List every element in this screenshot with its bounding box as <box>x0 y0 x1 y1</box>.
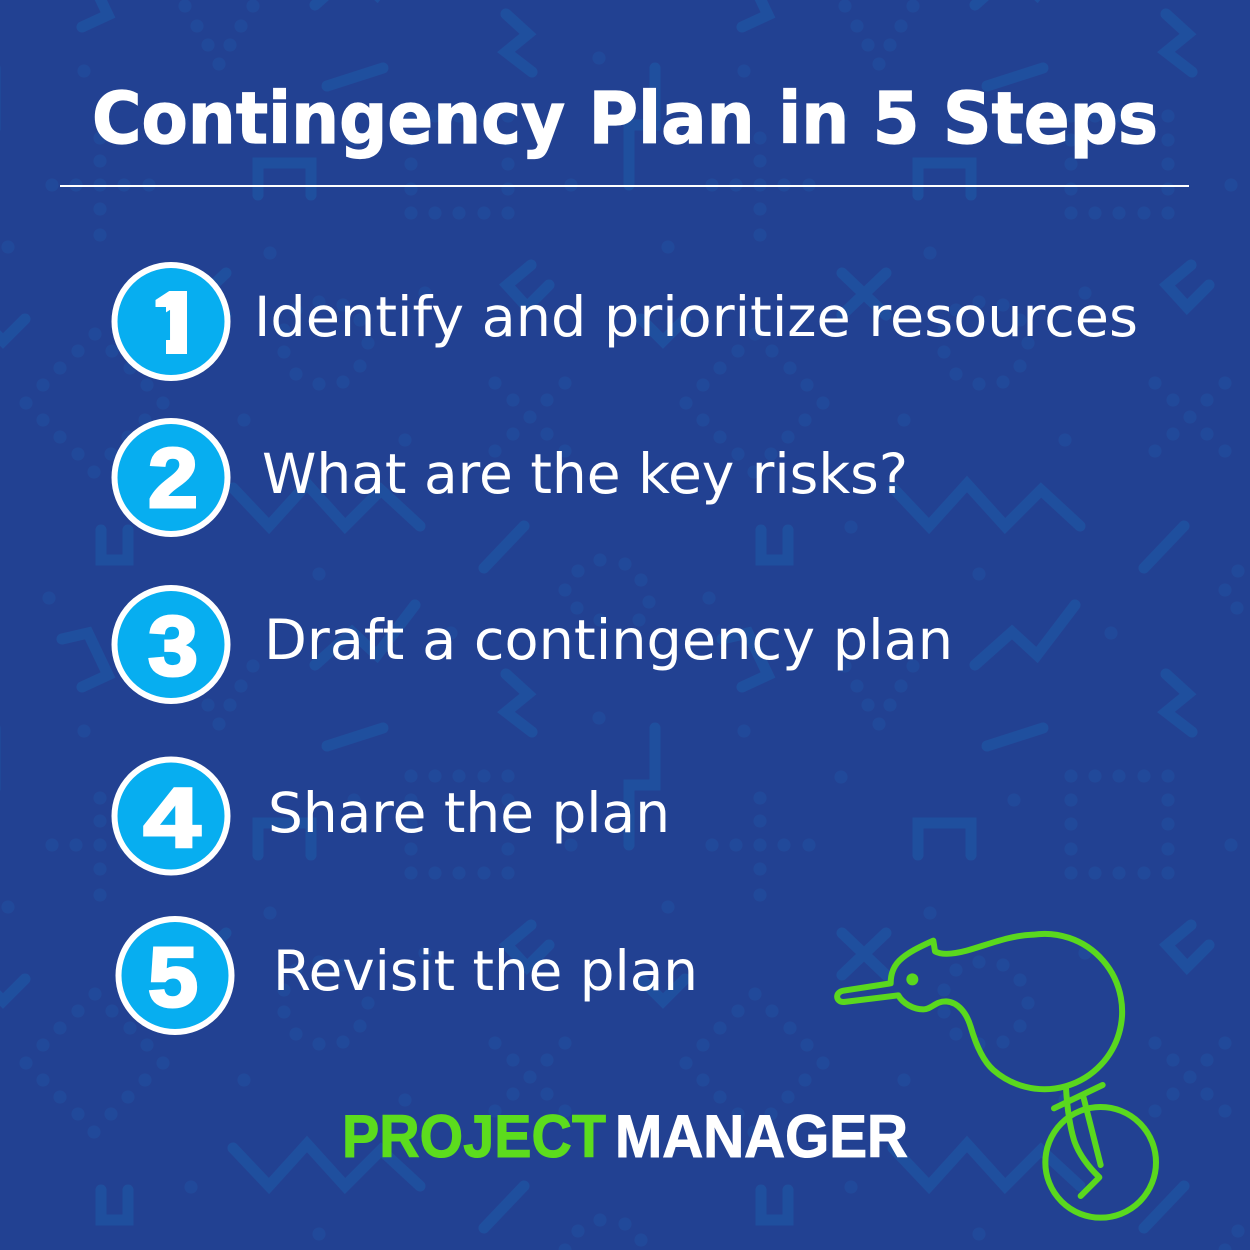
step 4 label: Share the plan <box>268 781 670 845</box>
step 4 <box>114 760 670 872</box>
step 3 number: 3 <box>148 599 198 693</box>
kiwi body <box>837 934 1122 1089</box>
title: Contingency Plan in 5 Steps <box>92 77 1158 160</box>
step 1 badge <box>114 265 228 378</box>
step 5 badge <box>118 919 232 1032</box>
logo: MANAGER: MANAGER <box>615 1103 908 1170</box>
step 4 badge <box>114 760 228 872</box>
step 1 number: 1 <box>154 273 202 372</box>
kiwi eye <box>906 973 918 985</box>
step 2 badge <box>114 421 228 534</box>
step 1 <box>114 265 1138 378</box>
unicycle wheel <box>1045 1107 1156 1218</box>
step 5 <box>118 919 698 1032</box>
step 3 <box>114 588 953 701</box>
logo wordmark <box>342 1103 908 1170</box>
unicycle frame <box>1054 1085 1103 1196</box>
step 2 <box>114 421 908 534</box>
icon: kiwi on unicycle <box>837 934 1156 1218</box>
step 5 label: Revisit the plan <box>273 939 698 1003</box>
step 3 badge <box>114 588 228 701</box>
step 1 label: Identify and prioritize resources <box>254 285 1138 349</box>
logo: PROJECT: PROJECT <box>342 1103 606 1170</box>
step 3 label: Draft a contingency plan <box>264 608 953 672</box>
step 2 label: What are the key risks? <box>262 442 908 506</box>
step 4 number: 4 <box>144 771 201 865</box>
step 2 number: 2 <box>148 431 198 525</box>
step 5 number: 5 <box>148 930 198 1024</box>
